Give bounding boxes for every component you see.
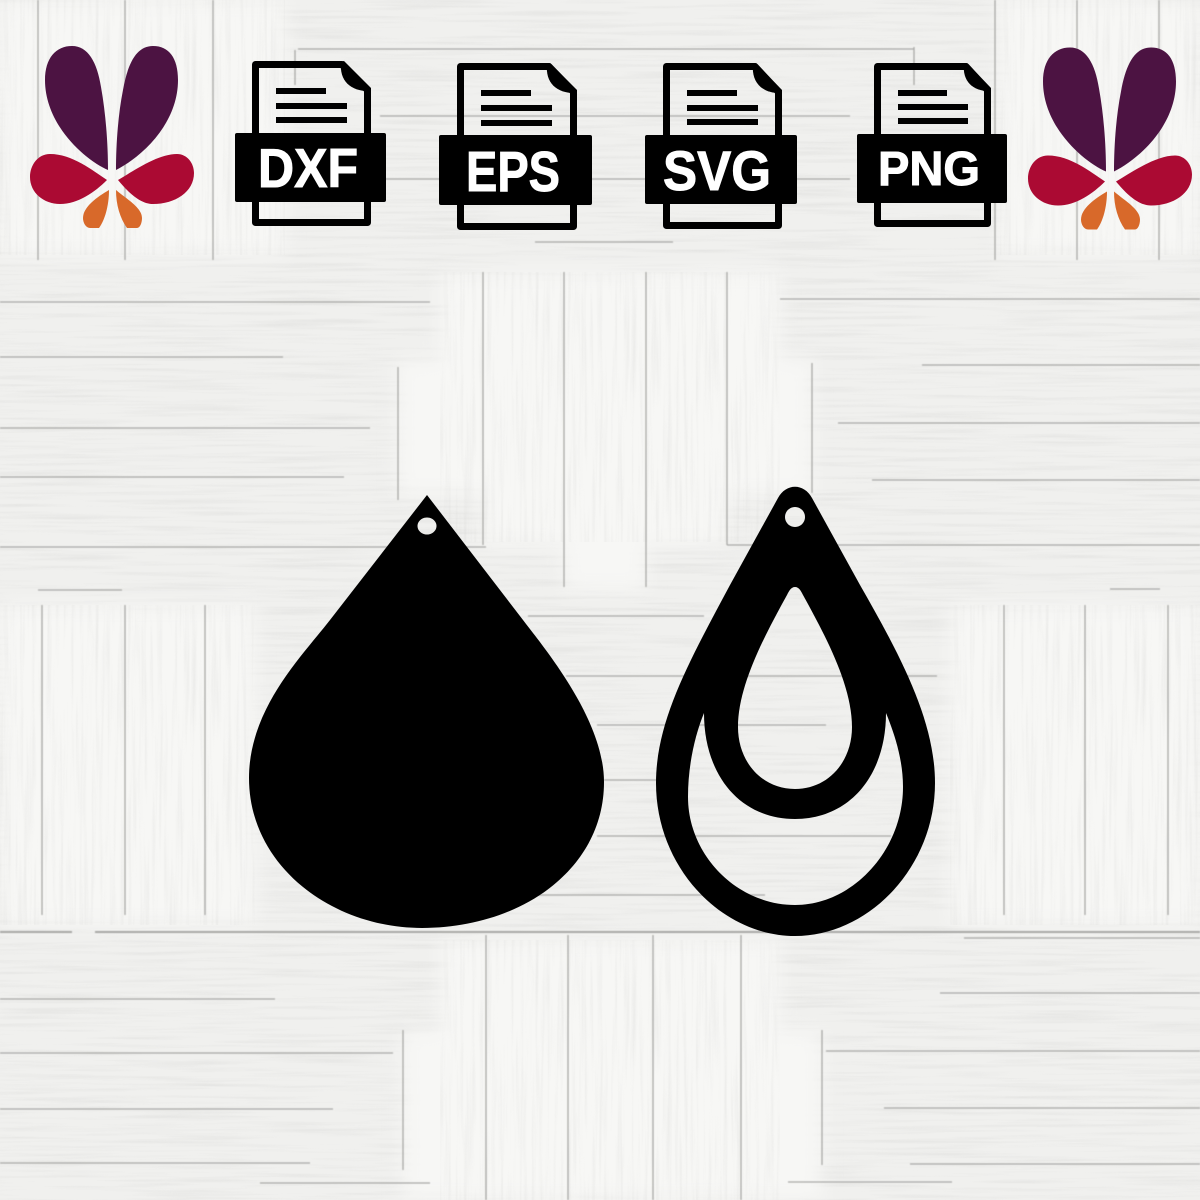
icon: PNG file [857, 63, 1007, 224]
earring: double cutout teardrop [656, 487, 935, 936]
icon: SVG file [645, 63, 797, 226]
logo: right butterfly flower [1028, 48, 1192, 230]
label: PNG: PNG [878, 143, 980, 196]
icon: DXF file [235, 61, 386, 222]
label: EPS: EPS [466, 140, 560, 204]
earring: solid teardrop [249, 495, 604, 928]
label: SVG: SVG [663, 139, 771, 202]
logo: left butterfly flower [30, 46, 194, 228]
label: DXF: DXF [258, 137, 358, 199]
icon: EPS file [439, 63, 592, 226]
